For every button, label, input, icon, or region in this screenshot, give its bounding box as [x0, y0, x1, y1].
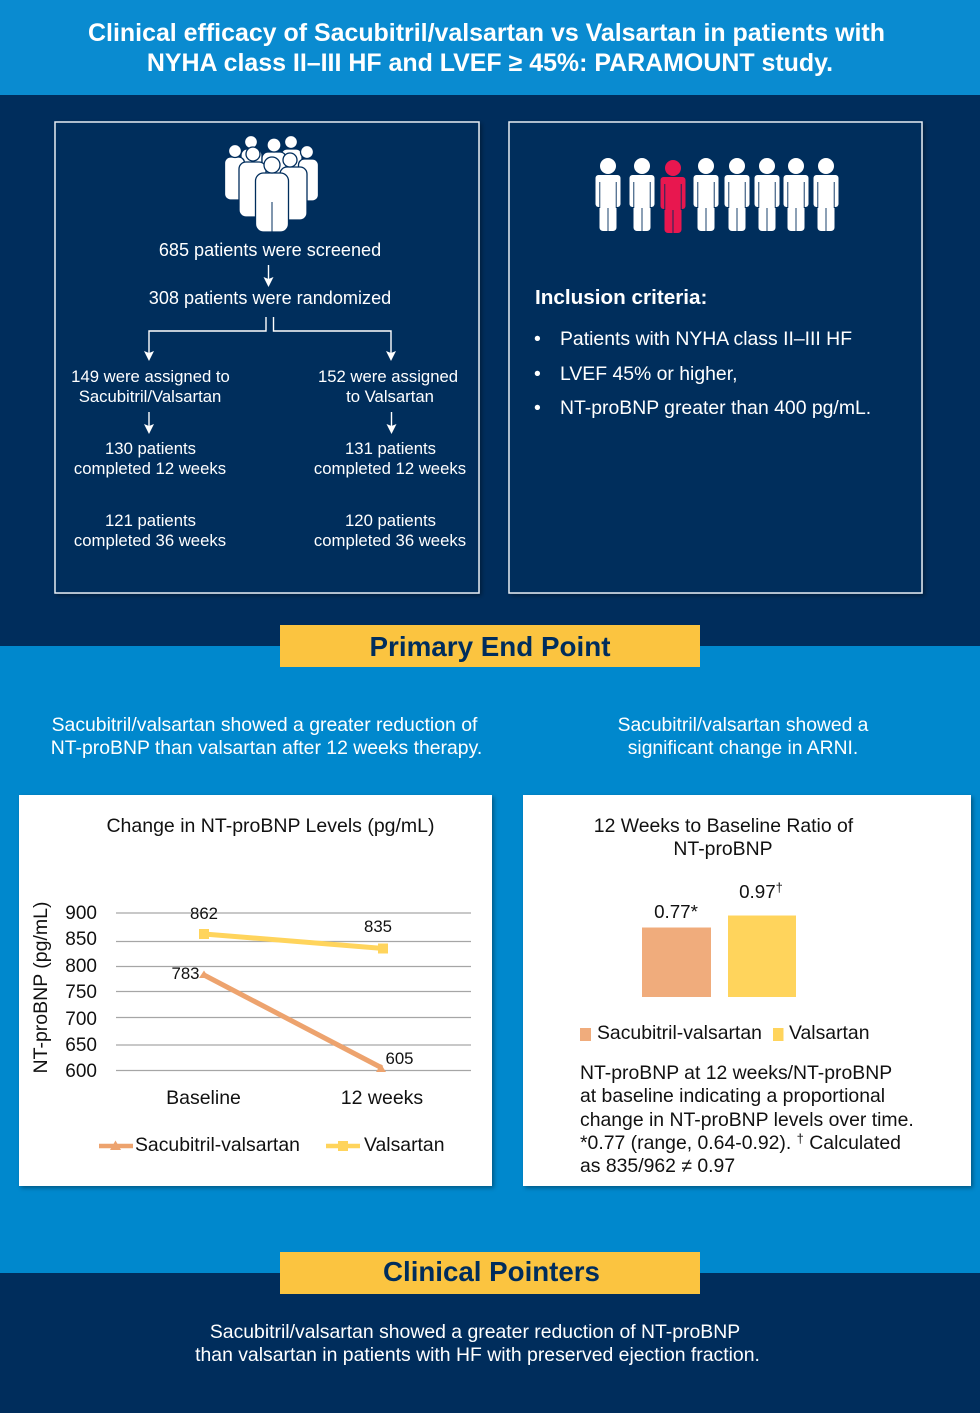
y axis labels: 850	[65, 929, 97, 950]
bar legend: Valsartan	[789, 1022, 869, 1044]
text: left finding: NT-proBNP than valsartan after 12 weeks therapy.	[51, 737, 482, 759]
flow text: sacubitril/valsartan arm: 149 were assigned to	[71, 367, 230, 386]
y axis labels: 700	[65, 1009, 97, 1030]
y axis title: NT-proBNP (pg/mL)	[30, 902, 52, 1073]
panel: inclusion criteria	[509, 122, 922, 593]
flow text: screened: 685 patients were screened	[159, 240, 381, 260]
inclusion list: •	[534, 363, 541, 385]
heading banner: primary end point	[280, 625, 700, 667]
flow text: valsartan arm: 120 patients	[345, 511, 436, 530]
text: left finding	[51, 714, 482, 759]
explanatory note: change in NT-proBNP levels over time.	[580, 1109, 914, 1131]
flow text: sacubitril/valsartan arm	[71, 367, 230, 550]
y axis labels: 750	[65, 982, 97, 1003]
text: left finding: Sacubitril/valsartan showed a greater reduction of	[52, 714, 478, 736]
data labels: 862	[190, 904, 218, 923]
arrow: screened to randomized	[268, 265, 270, 285]
flow text: randomized: 308 patients were randomized	[149, 288, 391, 308]
panel: patient flow	[55, 122, 479, 593]
heading banner: clinical pointers	[280, 1252, 700, 1294]
series: sacubitril-valsartan	[199, 970, 386, 1072]
flow text: valsartan arm: 131 patients	[345, 439, 436, 458]
text: right finding: significant change in ARNI.	[628, 738, 858, 759]
bar chart title	[594, 815, 854, 860]
inclusion list: LVEF 45% or higher,	[560, 363, 738, 385]
explanatory note: as 835/962 ≠ 0.97	[580, 1155, 735, 1177]
data labels: 835	[364, 917, 392, 936]
text: clinical pointers: than valsartan in patients with HF with preserved ejection fraction.	[195, 1344, 760, 1366]
text: right finding: Sacubitril/valsartan showed a	[618, 715, 869, 736]
heading banner: primary end point: Primary End Point	[370, 631, 610, 662]
navy clinical pointers section	[0, 1273, 980, 1413]
y axis labels: 900	[65, 903, 97, 924]
bar legend	[580, 1022, 869, 1044]
explanatory note: Calculated	[804, 1132, 901, 1154]
blue primary end point section	[0, 646, 980, 1273]
navy study design section	[0, 95, 980, 646]
bar chart title: NT-proBNP	[673, 838, 773, 860]
title: NYHA class II–III HF and LVEF ≥ 45%: PARAMOUNT study.	[147, 49, 833, 77]
y axis labels	[65, 903, 97, 1082]
flow text: sacubitril/valsartan arm: 121 patients	[105, 511, 196, 530]
arrow: split right	[274, 317, 391, 359]
bar chart title: 12 Weeks to Baseline Ratio of	[594, 815, 854, 837]
bar legend: Sacubitril-valsartan	[597, 1022, 762, 1044]
y axis labels: 650	[65, 1035, 97, 1056]
title	[88, 19, 885, 77]
panel: line chart	[19, 795, 492, 1186]
text: clinical pointers	[195, 1321, 760, 1366]
chart legend: Valsartan	[364, 1134, 444, 1156]
x axis labels: 12 weeks	[341, 1087, 423, 1109]
explanatory note: †	[797, 1131, 804, 1146]
arrow: split left	[149, 317, 266, 359]
flow text: sacubitril/valsartan arm: 130 patients	[105, 439, 196, 458]
chart title: Change in NT-proBNP Levels (pg/mL)	[106, 815, 435, 837]
bar: sacubitril-valsartan: 0.77*	[654, 901, 699, 922]
inclusion heading: Inclusion criteria:	[535, 286, 707, 309]
arrow: left arm	[148, 412, 150, 432]
inclusion list: •	[534, 328, 541, 350]
panel: ratio bar chart	[523, 795, 971, 1186]
title: Clinical efficacy of Sacubitril/valsartan vs Valsartan in patients with	[88, 19, 885, 47]
icon: patient crowd	[224, 136, 318, 232]
explanatory note: NT-proBNP at 12 weeks/NT-proBNP	[580, 1062, 892, 1084]
explanatory note: *0.77 (range, 0.64-0.92).	[580, 1132, 791, 1154]
bar: valsartan: †	[776, 880, 783, 895]
bar: valsartan: 0.97	[739, 881, 776, 902]
y axis labels: 600	[65, 1061, 97, 1082]
flow text: sacubitril/valsartan arm: Sacubitril/Valsartan	[79, 387, 221, 406]
chart legend: Sacubitril-valsartan	[135, 1134, 300, 1156]
explanatory note	[580, 1062, 914, 1177]
flow text: valsartan arm: completed 12 weeks	[314, 459, 466, 478]
flow text: sacubitril/valsartan arm: completed 36 weeks	[74, 531, 226, 550]
text: right finding	[618, 715, 869, 759]
header band	[0, 0, 980, 95]
inclusion list: Patients with NYHA class II–III HF	[560, 328, 852, 350]
flow text: valsartan arm: 152 were assigned	[318, 367, 458, 386]
bar: valsartan	[728, 880, 796, 997]
chart legend	[99, 1134, 444, 1156]
data labels: 605	[386, 1049, 414, 1068]
bar: sacubitril-valsartan	[642, 901, 711, 997]
heading banner: clinical pointers: Clinical Pointers	[383, 1256, 600, 1287]
arrow: right arm	[390, 412, 392, 432]
x axis labels	[166, 1087, 423, 1109]
flow text: valsartan arm: completed 36 weeks	[314, 531, 466, 550]
flow text: sacubitril/valsartan arm: completed 12 weeks	[74, 459, 226, 478]
inclusion list: NT-proBNP greater than 400 pg/mL.	[560, 397, 871, 419]
icon: row of people	[596, 158, 838, 234]
series: valsartan	[199, 929, 388, 954]
x axis labels: Baseline	[166, 1087, 241, 1109]
inclusion list	[534, 328, 871, 419]
flow text: valsartan arm	[314, 367, 466, 550]
data labels	[172, 904, 414, 1068]
flow text: valsartan arm: to Valsartan	[346, 387, 434, 406]
explanatory note: at baseline indicating a proportional	[580, 1085, 885, 1107]
data labels: 783	[172, 964, 200, 983]
inclusion list: •	[534, 397, 541, 419]
y axis labels: 800	[65, 956, 97, 977]
text: clinical pointers: Sacubitril/valsartan showed a greater reduction of NT-proBNP	[210, 1321, 740, 1343]
